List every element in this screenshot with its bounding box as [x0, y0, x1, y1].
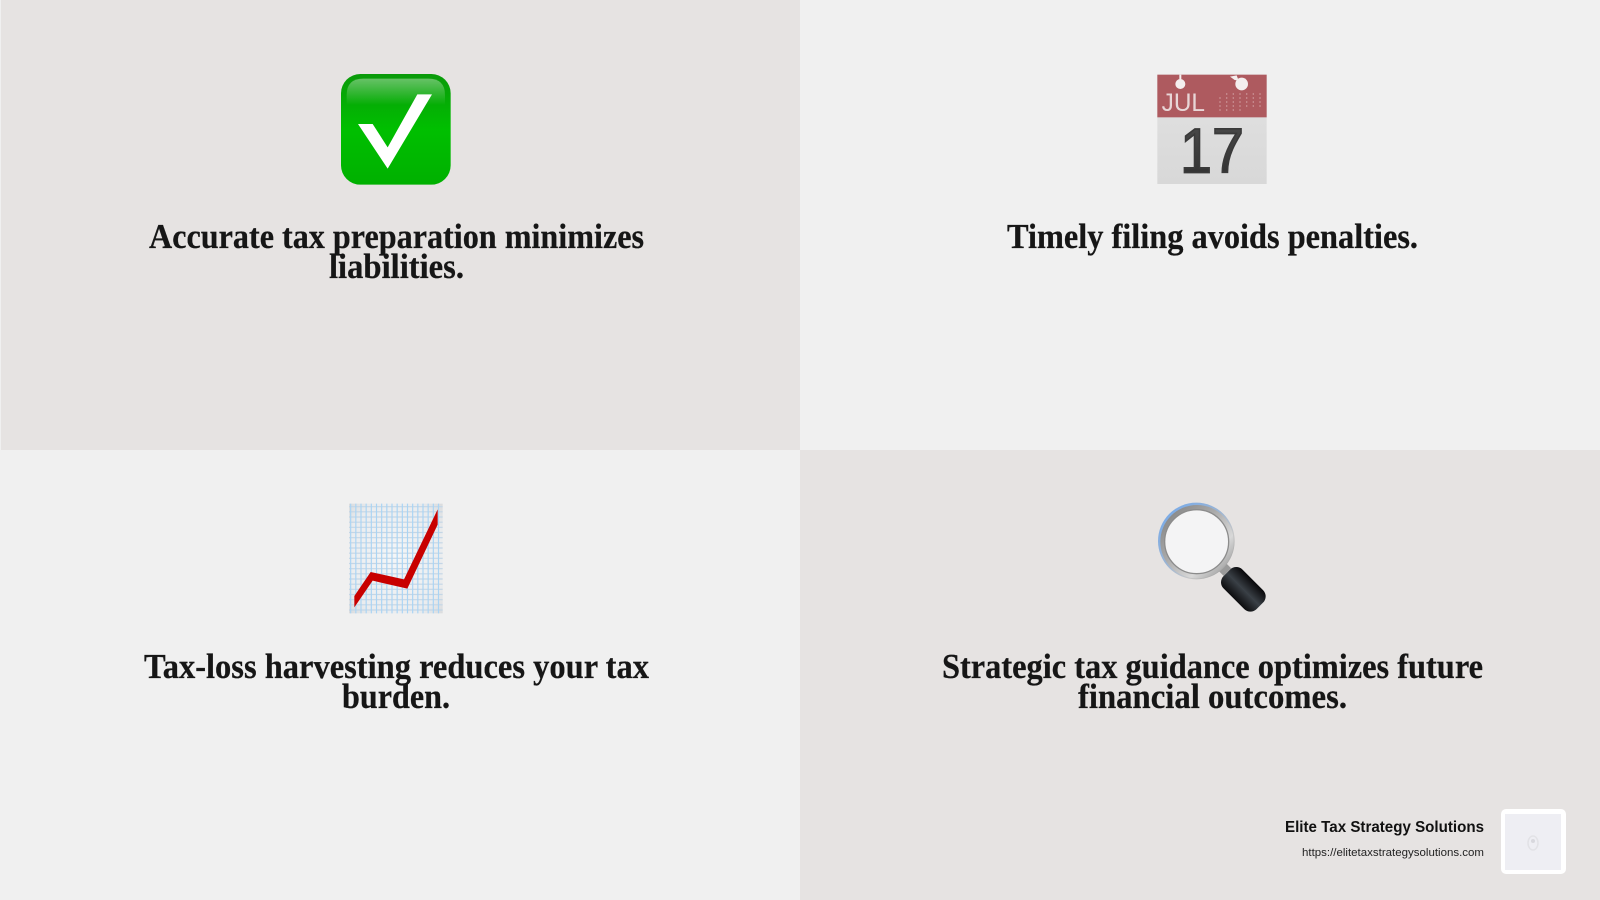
brand name: Elite Tax Strategy Solutions [1285, 819, 1484, 836]
heading: tax-loss harvesting reduces your tax burden: burden. [342, 677, 450, 716]
panel: timely filing [800, 0, 1600, 450]
heading: accurate tax preparation minimizes liabilities: Accurate tax preparation minimizes [149, 217, 644, 256]
heading: tax-loss harvesting reduces your tax burden: Tax-loss harvesting reduces your tax [144, 647, 649, 686]
brand url: https://elitetaxstrategysolutions.com [1302, 847, 1484, 859]
heading: strategic tax guidance optimizes future financial outcomes: Strategic tax guidance optimizes future [942, 647, 1483, 686]
footer: brand block [1285, 809, 1566, 874]
heading: tax-loss harvesting reduces your tax burden [144, 647, 649, 716]
panel: accurate tax preparation [1, 0, 800, 450]
heading: accurate tax preparation minimizes liabilities [149, 217, 644, 286]
icon: calendar July 17 [1157, 75, 1267, 186]
panel: tax-loss harvesting [0, 450, 800, 900]
heading: timely filing avoids penalties: Timely filing avoids penalties. [1007, 217, 1418, 256]
heading: accurate tax preparation minimizes liabilities: liabilities. [329, 247, 464, 286]
icon: green check mark [341, 74, 451, 185]
heading: strategic tax guidance optimizes future financial outcomes [942, 647, 1483, 716]
icon: calendar July 17: JUL [1162, 89, 1205, 117]
icon: magnifying glass [1158, 503, 1269, 615]
logo card [1501, 809, 1566, 874]
icon: calendar July 17: 17 [1180, 116, 1244, 186]
panel: strategic tax guidance [800, 450, 1600, 900]
heading: strategic tax guidance optimizes future financial outcomes: financial outcomes. [1078, 677, 1347, 716]
icon: chart with upward trend [349, 504, 443, 613]
